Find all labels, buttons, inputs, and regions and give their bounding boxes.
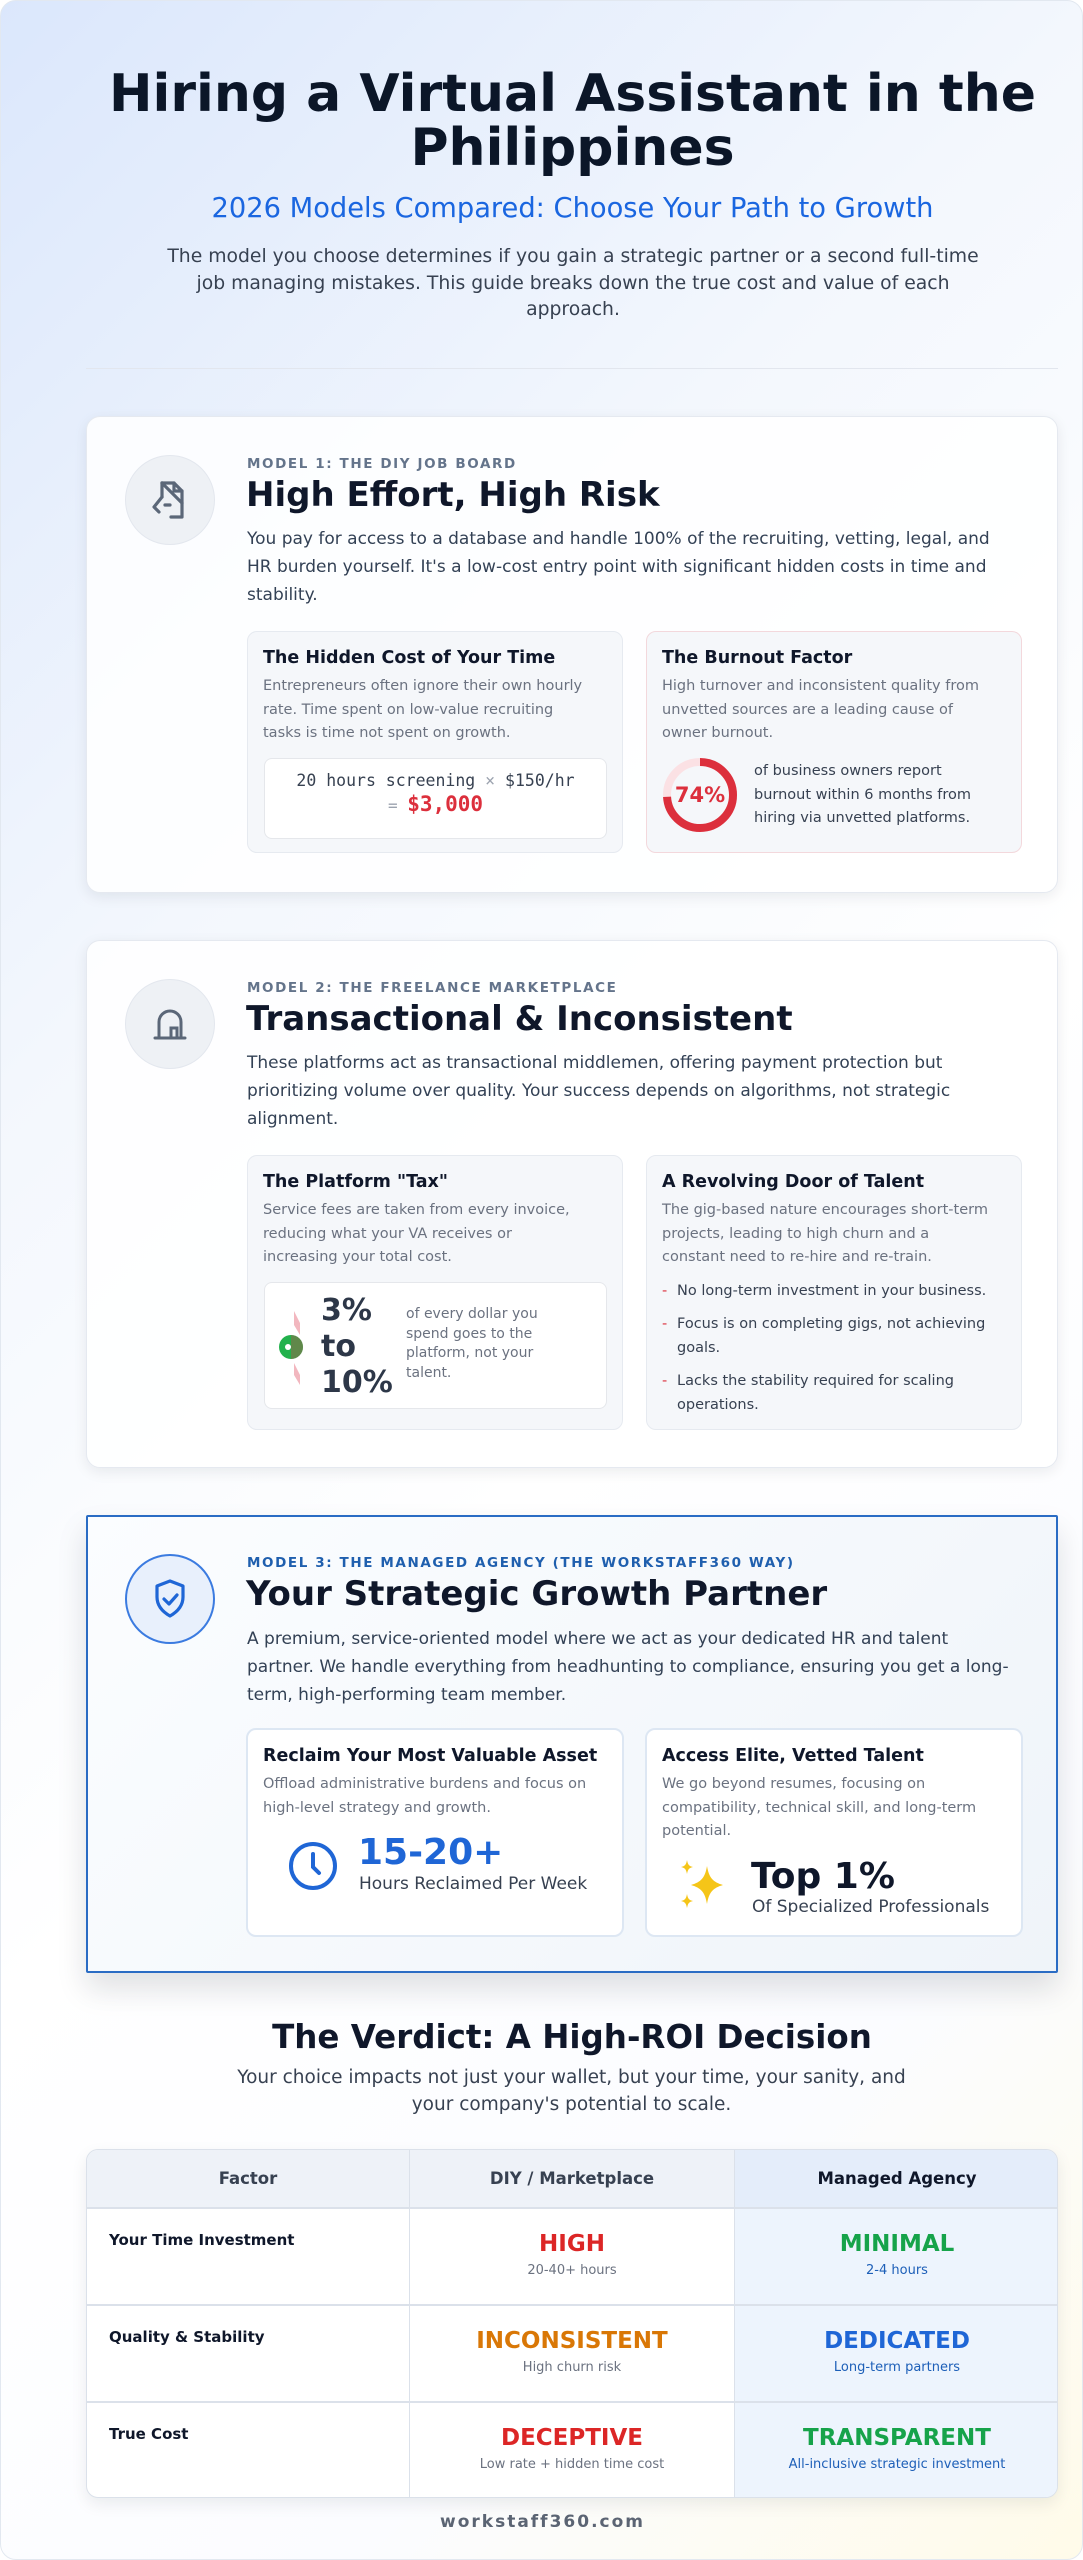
title: Hiring a Virtual Assistant in the Philippines — [109, 64, 1036, 178]
description: A premium, service-oriented model where we act as your dedicated HR and talent partner. We handle everything from headhunting to compliance, ensuring you get a long-term, high-performing team member. — [247, 1629, 1009, 1705]
icon: storefront arch — [125, 979, 215, 1069]
comparison table: All-inclusive strategic investment — [789, 2457, 1005, 2472]
description: You pay for access to a database and handle 100% of the recruiting, vetting, legal, and HR burden yourself. It's a low-cost entry point with significant hidden costs in time and stability. — [247, 529, 990, 605]
bullet list: No long-term investment in your business. — [677, 1283, 986, 1299]
comparison table: High churn risk — [523, 2360, 621, 2375]
sub-card: reclaim time: Offload administrative burdens and focus on high-level strategy and growth. — [263, 1776, 586, 1816]
tax stat box: 10% — [321, 1365, 393, 1400]
bullet list: Focus is on completing gigs, not achieving goals. — [677, 1316, 985, 1356]
label: MODEL 3: THE MANAGED AGENCY (THE WORKSTAFF360 WAY) — [247, 1555, 795, 1571]
intro text: The model you choose determines if you gain a strategic partner or a second full-time job managing mistakes. This guide breaks down the true cost and value of each approach. — [167, 246, 979, 320]
icon: money slice — [279, 1311, 303, 1385]
footer url: workstaff360.com — [440, 2512, 645, 2532]
heading: Your Strategic Growth Partner — [246, 1574, 827, 1614]
comparison table: Long-term partners — [834, 2360, 960, 2375]
ring chart 74% — [663, 758, 737, 832]
description: These platforms act as transactional middlemen, offering payment protection but prioritizing volume over quality. Your success depends on algorithms, not strategic alignment. — [247, 1053, 950, 1129]
sub-card: elite talent: Access Elite, Vetted Talent — [662, 1746, 924, 1766]
sub-card: elite talent: We go beyond resumes, focusing on compatibility, technical skill, and long-term potential. — [662, 1776, 976, 1839]
bullet list: - — [662, 1316, 667, 1332]
sub-card: hidden cost of time — [247, 631, 623, 853]
comparison table: TRANSPARENT — [803, 2425, 991, 2451]
panel: model 1 DIY job board — [86, 416, 1058, 893]
stat: top 1%: Top 1% — [751, 1856, 895, 1897]
comparison table: 2-4 hours — [866, 2263, 928, 2278]
tax stat box: 3% — [321, 1293, 372, 1328]
sub-card: reclaim time — [246, 1728, 624, 1937]
sub-card: revolving door: A Revolving Door of Talent — [662, 1172, 924, 1192]
comparison table: DIY / Marketplace — [490, 2169, 654, 2188]
sub-card: platform tax — [247, 1155, 623, 1430]
panel: model 2 freelance marketplace — [86, 940, 1058, 1468]
label: MODEL 2: THE FREELANCE MARKETPLACE — [247, 980, 617, 996]
comparison table: Low rate + hidden time cost — [480, 2457, 664, 2472]
bullet list: Lacks the stability required for scaling operations. — [677, 1373, 954, 1413]
burnout stat text: of business owners report burnout within 6 months from hiring via unvetted platforms. — [754, 763, 971, 826]
row: true cost: True Cost — [109, 2425, 188, 2443]
icon: shield check — [125, 1554, 215, 1644]
comparison table: 20-40+ hours — [527, 2263, 617, 2278]
formula box — [264, 758, 607, 839]
tax stat box: of every dollar you spend goes to the platform, not your talent. — [406, 1306, 538, 1380]
comparison table: Managed Agency — [817, 2169, 977, 2188]
stat: hours reclaimed: 15-20+ — [358, 1832, 503, 1873]
label: MODEL 1: THE DIY JOB BOARD — [247, 456, 517, 472]
panel: model 3 managed agency — [86, 1515, 1058, 1973]
row: quality — [87, 2306, 410, 2403]
verdict heading: The Verdict: A High-ROI Decision — [272, 2018, 872, 2056]
formula box: 20 hours screening × $150/hr — [296, 771, 575, 790]
bullet list: - — [662, 1373, 667, 1389]
sub-card: hidden cost of time: Entrepreneurs often ignore their own hourly rate. Time spent on low-value recruiting tasks is time not spent on growth. — [263, 678, 582, 741]
sub-card: burnout factor: The Burnout Factor — [662, 648, 852, 668]
bullet list — [662, 1283, 986, 1413]
icon: sparkles — [681, 1860, 723, 1908]
sub-card: hidden cost of time: The Hidden Cost of Your Time — [263, 648, 555, 668]
ring chart 74%: 74% — [675, 783, 725, 807]
verdict subtext: Your choice impacts not just your wallet, but your time, your sanity, and your company's potential to scale. — [237, 2067, 906, 2114]
row: true cost — [87, 2403, 410, 2499]
comparison table: MINIMAL — [840, 2231, 954, 2257]
icon: file signature — [125, 455, 215, 545]
sub-card: reclaim time: Reclaim Your Most Valuable Asset — [263, 1746, 597, 1766]
subtitle: 2026 Models Compared: Choose Your Path to Growth — [212, 193, 933, 224]
sub-card: revolving door — [646, 1155, 1022, 1430]
table header: Factor — [219, 2169, 277, 2188]
heading: Transactional & Inconsistent — [246, 999, 793, 1039]
bullet list: - — [662, 1283, 667, 1299]
heading: High Effort, High Risk — [246, 475, 660, 515]
row: time investment — [87, 2209, 410, 2306]
formula box: = $3,000 — [388, 792, 483, 816]
sub-card: platform tax: The Platform "Tax" — [263, 1172, 448, 1192]
comparison table — [86, 2149, 1058, 2498]
comparison table: INCONSISTENT — [476, 2328, 668, 2354]
sub-card: platform tax: Service fees are taken from every invoice, reducing what your VA receives or increasing your total cost. — [263, 1202, 570, 1265]
table header — [87, 2150, 410, 2209]
sub-card: burnout factor — [646, 631, 1022, 853]
sub-card: burnout factor: High turnover and inconsistent quality from unvetted sources are a leading cause of owner burnout. — [662, 678, 979, 741]
comparison table: HIGH — [539, 2231, 605, 2257]
sub-card: revolving door: The gig-based nature encourages short-term projects, leading to high churn and a constant need to re-hire and re-train. — [662, 1202, 988, 1265]
sub-card: elite talent — [645, 1728, 1023, 1937]
tax stat box — [264, 1282, 607, 1409]
comparison table: DECEPTIVE — [501, 2425, 643, 2451]
icon: clock — [289, 1842, 337, 1890]
row: time investment: Your Time Investment — [109, 2231, 294, 2249]
comparison table: DEDICATED — [824, 2328, 970, 2354]
row: quality: Quality & Stability — [109, 2328, 265, 2346]
sub-card: elite talent: Of Specialized Professionals — [752, 1897, 989, 1917]
sub-card: reclaim time: Hours Reclaimed Per Week — [359, 1874, 587, 1894]
tax stat box: to — [321, 1329, 356, 1364]
